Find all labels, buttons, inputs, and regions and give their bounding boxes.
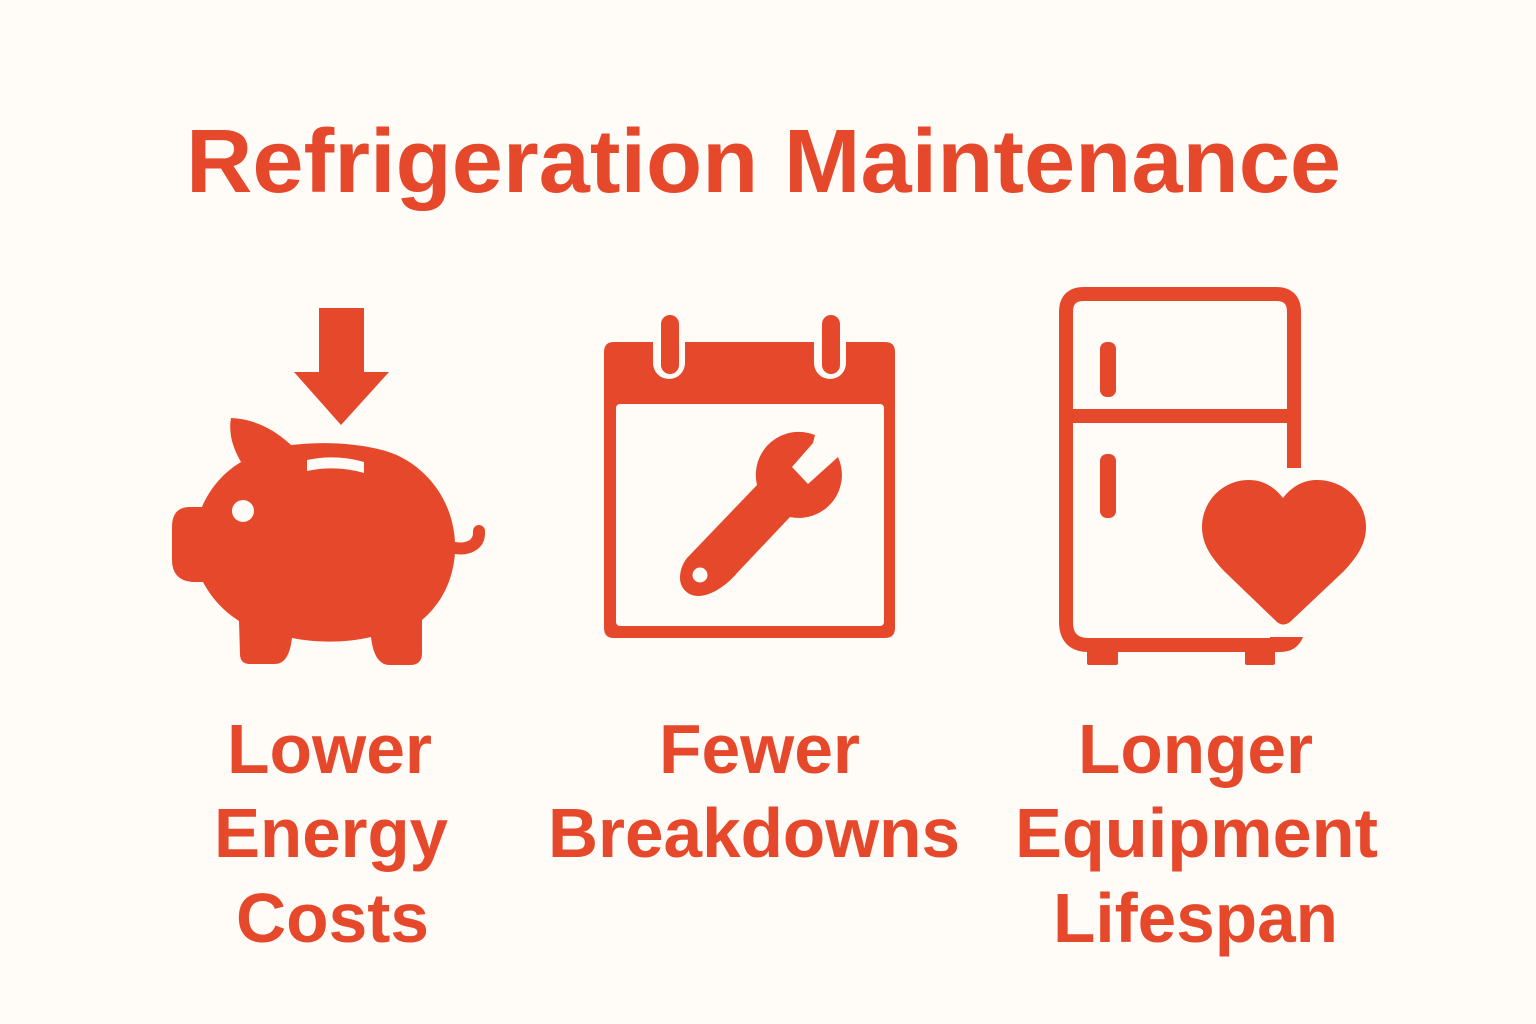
title: Refrigeration Maintenance: [186, 112, 1341, 212]
icon: down arrow into piggy bank: [294, 308, 389, 425]
icon: piggy bank: [172, 418, 479, 665]
label: lower energy costs: Costs: [236, 879, 429, 957]
icon: refrigerator with heart: [1066, 294, 1366, 665]
label: fewer breakdowns: Fewer: [659, 710, 860, 788]
label: longer equipment lifespan: Equipment: [1015, 794, 1378, 872]
label: longer equipment lifespan: Lifespan: [1053, 879, 1338, 957]
label: fewer breakdowns: Breakdowns: [548, 794, 960, 872]
label: lower energy costs: Lower: [227, 710, 432, 788]
label: longer equipment lifespan: [1015, 710, 1378, 957]
label: lower energy costs: Energy: [214, 794, 448, 872]
label: longer equipment lifespan: Longer: [1078, 710, 1313, 788]
label: fewer breakdowns: [548, 710, 960, 872]
icon: maintenance calendar: [604, 312, 895, 638]
label: lower energy costs: [214, 710, 448, 957]
